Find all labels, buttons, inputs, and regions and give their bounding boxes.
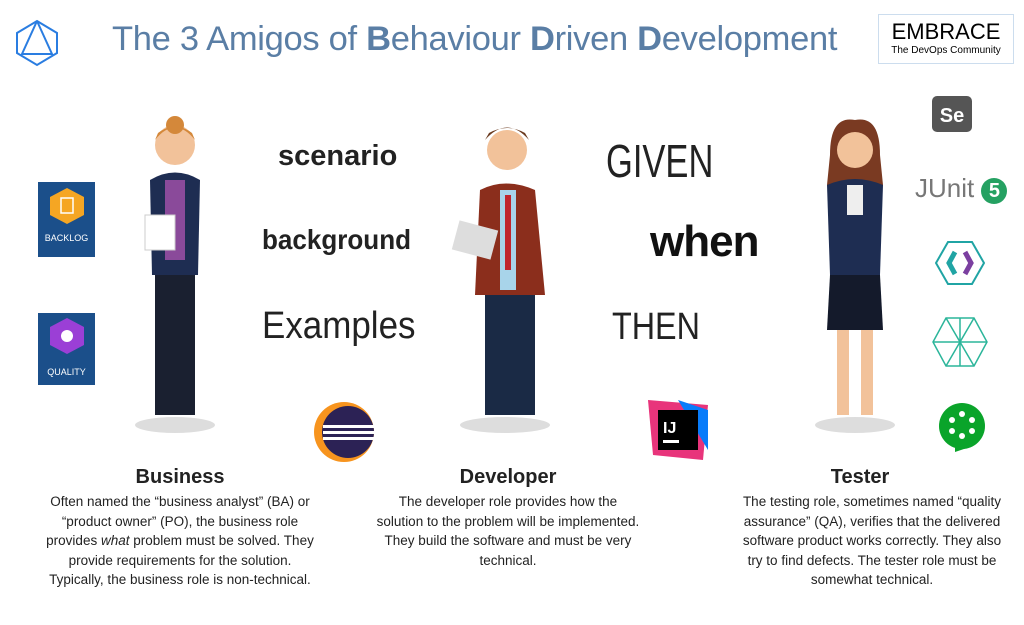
icon: backlog: BACKLOG bbox=[45, 233, 88, 243]
logo: EMBRACE: The DevOps Community bbox=[891, 45, 1001, 56]
text: developer: The developer role provides how the solution to the problem will be implemented. They build the software and must be very technical. bbox=[377, 494, 639, 568]
figure: developer bbox=[452, 128, 550, 433]
icon: selenium: Se bbox=[940, 105, 964, 127]
icon: junit5: JUnit bbox=[915, 173, 974, 203]
word: GIVEN: GIVEN bbox=[606, 135, 713, 187]
figure: business woman bbox=[135, 116, 215, 433]
text: tester: The testing role, sometimes named “quality assurance” (QA), verifies that the delivered software product works correctly. They also try to find defects. The tester role must be somewhat technical. bbox=[743, 494, 1001, 587]
logo: EMBRACE: EMBRACE bbox=[892, 19, 1000, 44]
icon: backlog bbox=[38, 182, 95, 257]
heading: Tester: Tester bbox=[831, 466, 889, 488]
icon: logo hexagon bbox=[16, 20, 58, 66]
icon: junit5 bbox=[915, 173, 1007, 204]
icon: intellij: IJ bbox=[663, 420, 676, 437]
icon: cucumber bbox=[939, 403, 985, 452]
icon: selenium bbox=[932, 96, 972, 132]
heading: Developer: Developer bbox=[460, 466, 556, 488]
icon: hex brackets bbox=[935, 241, 985, 285]
icon: eclipse bbox=[314, 402, 374, 462]
icon: cube hex bbox=[932, 317, 988, 367]
word: when: when bbox=[650, 217, 758, 266]
icon: quality: QUALITY bbox=[47, 367, 86, 377]
word: background: background bbox=[262, 224, 411, 255]
word: THEN: THEN bbox=[612, 306, 700, 348]
icon: intellij bbox=[648, 400, 708, 460]
logo: EMBRACE bbox=[878, 14, 1014, 64]
heading: Business: Business bbox=[136, 466, 224, 488]
icon: quality bbox=[38, 313, 95, 385]
figure: tester bbox=[815, 120, 895, 433]
word: scenario: scenario bbox=[278, 140, 397, 172]
icon: junit5: 5 bbox=[989, 180, 1000, 202]
text: business: Often named the “business analyst” (BA) or “product owner” (PO), the business role provides what problem must be solved. They provide requirements for the solution. Typically, the business role is non-technical. bbox=[46, 494, 314, 587]
word: Examples: Examples bbox=[262, 305, 415, 347]
title: The 3 Amigos of Behaviour Driven Development bbox=[112, 20, 837, 58]
